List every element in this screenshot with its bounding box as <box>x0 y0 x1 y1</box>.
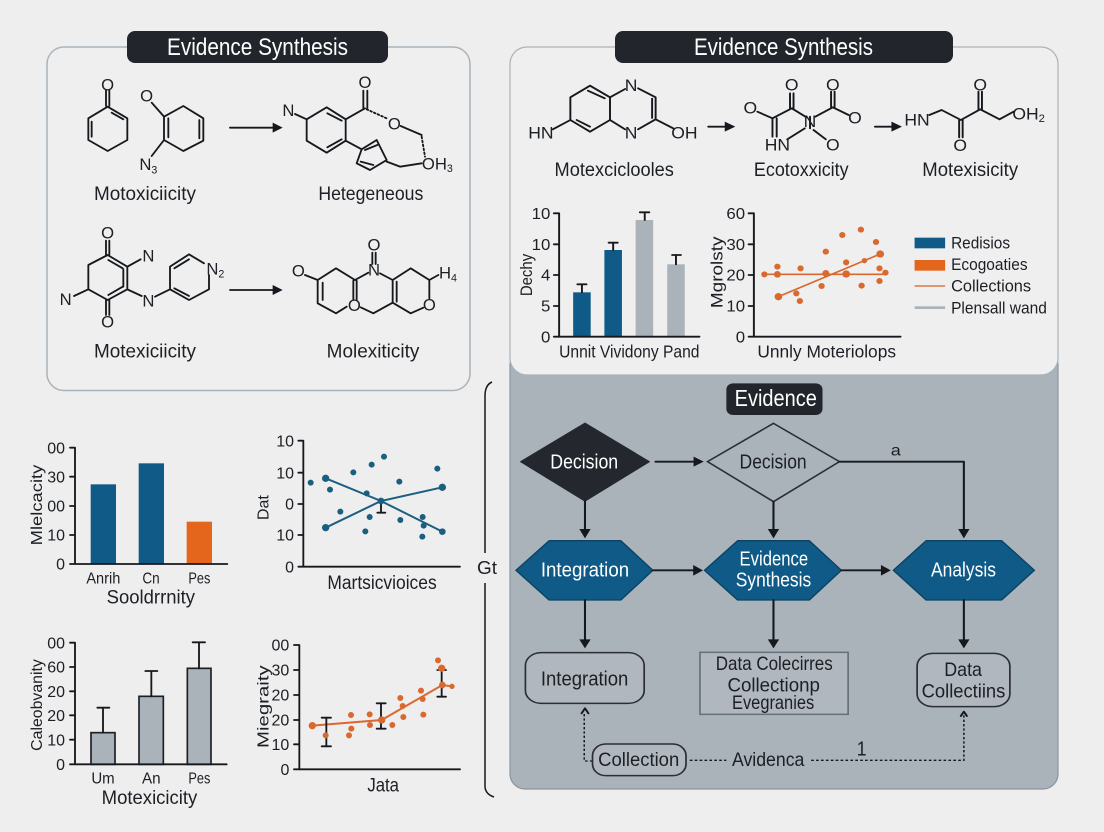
bar chart: Caleobvanity: Motexicicity <box>102 788 198 809</box>
bar chart: Caleobvanity: 0 <box>56 757 65 774</box>
hexagon: Integration: Integration <box>541 559 629 581</box>
arrow: Decision to Analysis: a <box>891 442 901 459</box>
box: Data Collectiins <box>917 653 1010 707</box>
diamond: outlined Decision: Decision <box>740 451 807 473</box>
hexagon: Analysis <box>893 541 1034 600</box>
bar chart: Dechy: Dechy <box>517 253 536 296</box>
molecule: Motexciclooles: Motexciclooles <box>555 159 674 181</box>
scatter chart: Mgrolsty: 0 <box>736 329 745 346</box>
molecule: Ecotoxxicity: O <box>826 76 840 94</box>
molecule group: Motoxiciicity: O <box>101 75 114 94</box>
heading: left Evidence Synthesis: Evidence Synthesis <box>167 34 348 61</box>
hexagon: Evidence Synthesis <box>704 541 841 600</box>
molecule: Motexiciicity: N <box>142 292 154 311</box>
bar chart: Mlelcacity: 00 <box>47 499 65 516</box>
scatter chart: Mgrolsty <box>708 205 901 361</box>
arrow: Decision to Integration <box>579 501 591 538</box>
heading: left Evidence Synthesis <box>127 31 388 63</box>
scatter chart: Dat: 10 <box>276 528 294 545</box>
panel: right molecules and charts <box>510 31 1058 375</box>
box: Integration: Integration <box>541 668 628 690</box>
molecule: Molexiticity: N <box>368 261 380 280</box>
bar chart: Mlelcacity: Anrih <box>86 570 120 587</box>
molecule: Motexciclooles: OH <box>671 124 698 143</box>
box: Data Colecirres <box>700 652 848 714</box>
diamond: outlined Decision <box>708 423 839 502</box>
hexagon: Evidence Synthesis: Evidence <box>740 548 808 570</box>
heading: Evidence: Evidence <box>735 386 817 412</box>
box: Data Collectiins: Collectiins <box>922 682 1005 702</box>
scatter chart: Mgrolsty: 30 <box>726 236 745 254</box>
molecule: Motexiciicity: Motexiciicity <box>94 341 196 362</box>
panel: Evidence flowchart background <box>510 350 1058 789</box>
molecule: Motexisicity: OH <box>1012 105 1039 123</box>
box: Integration <box>525 653 644 703</box>
scatter chart: Dat <box>255 433 460 594</box>
hexagon: Integration <box>516 541 653 600</box>
molecule group: Motoxiciicity: 3 <box>151 164 157 176</box>
molecule group: Motoxiciicity: O <box>140 86 153 105</box>
molecule: Motexisicity: O <box>973 76 987 94</box>
molecule: Motexiciicity: 2 <box>218 268 224 280</box>
arrow: Integration down <box>579 600 591 648</box>
bar chart: Mlelcacity <box>29 440 227 608</box>
bar chart: Caleobvanity: 20 <box>47 708 65 725</box>
molecule: Motexisicity: O <box>953 136 967 155</box>
arrow: Analysis down <box>958 600 970 648</box>
bar chart: Caleobvanity: 00 <box>47 635 65 652</box>
molecule: Motexciclooles: N <box>625 124 637 143</box>
molecule: Motexiciicity: N <box>206 260 218 279</box>
legend: Ecogoaties <box>951 255 1028 274</box>
box: Collection <box>593 744 686 776</box>
arrow: Decision to Evidence Synthesis <box>768 502 779 538</box>
scatter chart: Dat: Dat <box>255 495 272 520</box>
scatter chart: Dat: Martsicvioices <box>327 573 437 594</box>
box: Data Colecirres: Collectionp <box>727 676 820 696</box>
molecule: Molexiticity: H <box>439 264 451 283</box>
diamond: dark Decision: Decision <box>550 451 618 473</box>
molecule: Motexisicity: HN <box>904 111 930 129</box>
molecule: Molexiticity: 4 <box>451 272 457 284</box>
molecule: Motexiciicity <box>60 224 224 362</box>
line chart: Miegraity: Jata <box>367 776 399 797</box>
bar chart: Mlelcacity: Sooldrrnity <box>107 587 195 608</box>
bar chart: Dechy: Unnit Vividony Pand <box>559 342 699 361</box>
legend: Redisios <box>951 234 1010 252</box>
heading: right Evidence Synthesis <box>615 31 953 63</box>
bar chart: Mlelcacity: Mlelcacity <box>29 465 46 545</box>
dotted connector: Avidenca to Data Collectiins: 1 <box>857 738 867 760</box>
line chart: Miegraity: 20 <box>272 713 289 730</box>
bar chart: Dechy: 5 <box>541 298 550 316</box>
dotted arrow: Collection to Integration <box>582 708 593 761</box>
line chart: Miegraity <box>255 638 460 797</box>
scatter chart: Dat: 10 <box>276 433 294 450</box>
molecule: Molexiticity: O <box>348 296 361 315</box>
molecule: Ecotoxxicity: O <box>848 109 862 128</box>
molecule: Motexiciicity: O <box>101 313 114 332</box>
molecule: Molexiticity: Molexiticity <box>327 341 420 362</box>
bar chart: Mlelcacity: 10 <box>47 528 65 545</box>
bar chart: Mlelcacity: Pes <box>188 570 210 587</box>
molecule: Ecotoxxicity: HN <box>765 136 790 154</box>
molecule: Hetegeneous: OH <box>422 154 447 173</box>
arrow: to Ecotoxxicity <box>708 122 735 132</box>
molecule: Motexciclooles: N <box>625 76 637 95</box>
hexagon: Analysis: Analysis <box>931 559 996 581</box>
bar chart: Mlelcacity: 00 <box>47 440 65 457</box>
heading: Evidence <box>726 383 822 415</box>
molecule: Ecotoxxicity: O <box>744 99 757 118</box>
bar chart: Dechy: 0 <box>541 329 550 346</box>
box: Data Collectiins: Data <box>944 660 983 681</box>
line chart: Miegraity: Miegraity <box>255 665 272 748</box>
molecule: Hetegeneous: N <box>282 101 294 120</box>
molecule: Hetegeneous: 3 <box>447 163 453 175</box>
molecule: Motexciclooles <box>528 76 698 181</box>
scatter chart: Mgrolsty: 10 <box>726 298 745 316</box>
dotted connector: Avidenca to Data Collectiins: Avidenca <box>732 750 805 771</box>
legend <box>915 234 1047 317</box>
bracket with Gt label: Gt <box>477 558 497 578</box>
molecule: Molexiticity: O <box>423 295 436 314</box>
bar chart: Dechy: 10 <box>532 205 550 223</box>
molecule: Motexisicity: 2 <box>1039 113 1045 125</box>
hexagon: Evidence Synthesis: Synthesis <box>736 569 811 591</box>
line chart: Miegraity: 0 <box>280 762 289 779</box>
molecule: Molexiticity: O <box>292 261 305 280</box>
scatter chart: Mgrolsty: 20 <box>726 267 745 285</box>
bar chart: Caleobvanity: 10 <box>47 732 65 749</box>
bar chart: Caleobvanity: Caleobvanity <box>29 659 46 751</box>
heading: right Evidence Synthesis: Evidence Synthesis <box>694 34 873 61</box>
molecule: Ecotoxxicity <box>744 76 862 181</box>
molecule group: Motoxiciicity: Motoxiciicity <box>94 184 196 205</box>
molecule: Ecotoxxicity: N <box>804 112 816 131</box>
bar chart: Dechy <box>517 205 699 361</box>
box: Data Colecirres: Data Colecirres <box>716 654 833 675</box>
molecule: Hetegeneous: O <box>359 73 372 92</box>
arrow: second left reaction <box>230 285 283 295</box>
molecule: Motexisicity: Motexisicity <box>922 159 1018 181</box>
scatter chart: Dat: 0 <box>285 497 294 514</box>
dotted connector: Avidenca to Data Collectiins <box>690 712 967 771</box>
panel: left molecules <box>47 31 470 390</box>
molecule: Motexiciicity: N <box>60 290 72 309</box>
molecule: Motexciclooles: HN <box>528 124 554 143</box>
molecule: Ecotoxxicity: Ecotoxxicity <box>754 159 849 181</box>
bar chart: Dechy: 10 <box>532 236 550 254</box>
line chart: Miegraity: 30 <box>272 663 289 680</box>
scatter chart: Mgrolsty: Unnly Moteriolops <box>757 342 896 361</box>
scatter chart: Dat: 10 <box>276 465 294 482</box>
molecule: Ecotoxxicity: O <box>785 76 799 94</box>
molecule: Motexisicity <box>904 76 1045 181</box>
legend: Collections <box>951 277 1031 296</box>
molecule: Molexiticity: O <box>368 235 381 254</box>
arrow: Evidence Synthesis down <box>768 600 779 648</box>
bar chart: Caleobvanity <box>29 635 227 809</box>
bar chart: Caleobvanity: 20 <box>47 684 65 701</box>
bar chart: Caleobvanity: An <box>142 770 161 787</box>
arrow: to Motexisicity <box>875 122 902 132</box>
molecule: Hetegeneous: O <box>388 114 401 133</box>
flowchart: Evidence process <box>516 383 1034 776</box>
arrow: Integration to Evidence Synthesis <box>653 565 703 576</box>
molecule: Ecotoxxicity: O <box>826 136 840 154</box>
bar chart: Caleobvanity: Pes <box>188 770 210 787</box>
molecule: Hetegeneous <box>282 73 453 205</box>
diamond: dark Decision <box>521 423 649 501</box>
bar chart: Caleobvanity: 60 <box>47 660 65 677</box>
legend: Plensall wand <box>951 299 1047 317</box>
molecule: Motexiciicity: O <box>101 224 114 243</box>
bar chart: Mlelcacity: 30 <box>47 469 65 486</box>
bar chart: Mlelcacity: Cn <box>142 570 160 587</box>
bar chart: Caleobvanity: Um <box>91 770 115 787</box>
molecule: Hetegeneous: Hetegeneous <box>318 184 423 205</box>
line chart: Miegraity: 20 <box>272 688 289 705</box>
bar chart: Dechy: 4 <box>541 267 550 285</box>
bracket with Gt label <box>477 382 497 797</box>
scatter chart: Mgrolsty: Mgrolsty <box>708 236 727 308</box>
line chart: Miegraity: 00 <box>272 638 289 655</box>
arrow: first left reaction <box>230 123 283 133</box>
line chart: Miegraity: 10 <box>272 737 289 754</box>
box: Data Colecirres: Evegranies <box>732 693 814 714</box>
scatter chart: Dat: 0 <box>285 559 294 576</box>
molecule group: Motoxiciicity: N <box>139 155 151 174</box>
molecule: Motexiciicity: N <box>142 246 154 265</box>
bar chart: Mlelcacity: 0 <box>56 557 65 574</box>
molecule: Molexiticity <box>292 235 457 362</box>
box: Collection: Collection <box>598 750 679 771</box>
arrow: Decision to Analysis <box>839 442 970 538</box>
scatter chart: Mgrolsty: 60 <box>726 205 745 223</box>
molecule group: Motoxiciicity <box>88 75 203 205</box>
arrow: Evidence Synthesis to Analysis <box>841 565 891 576</box>
arrow: Decision to Decision <box>655 457 704 467</box>
